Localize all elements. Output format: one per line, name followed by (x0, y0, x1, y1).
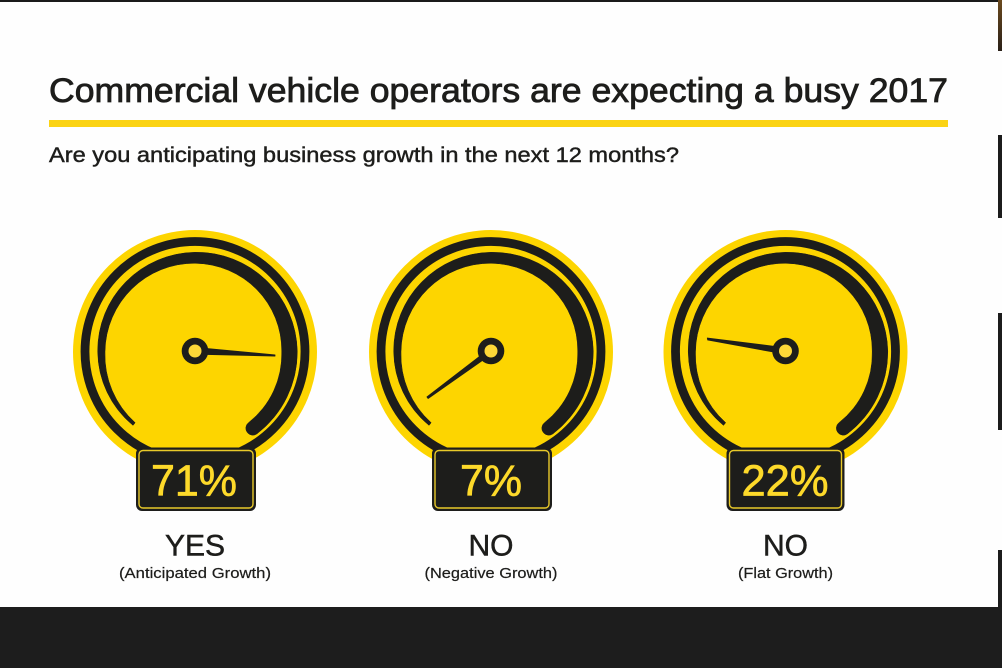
gauge dial 71% (73, 230, 317, 474)
title underline (49, 120, 948, 127)
label YES: YES (165, 530, 225, 562)
subtitle question: Are you anticipating business growth in the next 12 months? (49, 143, 679, 167)
value box 22%: 22% (742, 456, 828, 506)
top edge strip (0, 0, 1002, 2)
title: Commercial vehicle operators are expecting a busy 2017 (49, 72, 948, 110)
value box 7%: 7% (460, 456, 522, 506)
footer band (0, 607, 1002, 668)
gauge: 22% no (664, 230, 908, 582)
gauge dial 7% (369, 230, 613, 474)
label NO flat: NO (763, 530, 808, 562)
sublabel negative growth: (Negative Growth) (424, 566, 558, 582)
gauge: 7% no (369, 230, 613, 582)
label NO: NO (468, 530, 514, 562)
sublabel flat growth: (Flat Growth) (738, 566, 833, 582)
gauge: 71% yes (73, 230, 317, 582)
value box 7% (432, 448, 552, 511)
sublabel anticipated growth: (Anticipated Growth) (119, 566, 271, 582)
right edge photo strips (998, 0, 1002, 607)
value box 22% (726, 448, 844, 511)
value box 71%: 71% (151, 456, 237, 506)
gauge dial 22% (664, 230, 908, 474)
value box 71% (136, 448, 256, 511)
